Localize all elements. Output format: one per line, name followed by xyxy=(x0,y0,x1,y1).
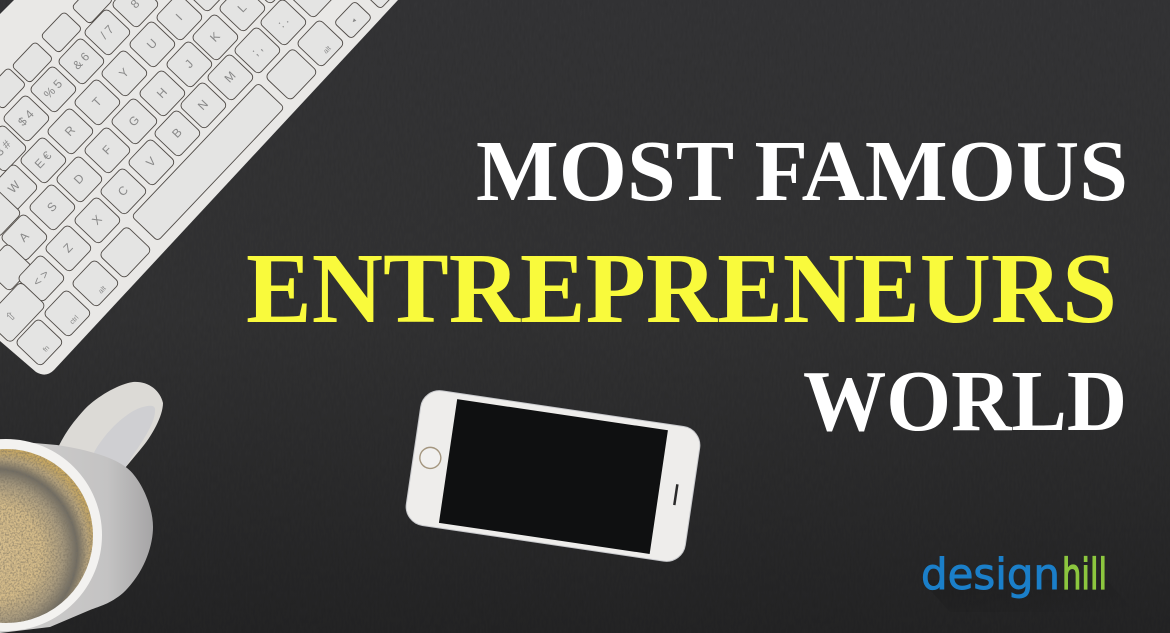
keyboard keys: alt xyxy=(98,285,108,295)
keyboard xyxy=(0,0,401,375)
keyboard keys xyxy=(0,0,401,367)
keyboard keys: alt xyxy=(323,45,333,55)
mug handle xyxy=(57,382,163,478)
keyboard keys: T xyxy=(89,94,105,109)
keyboard keys: K xyxy=(207,29,223,45)
logo wordmark: hill: hill xyxy=(1062,550,1107,600)
home button xyxy=(418,446,442,470)
keyboard keys: W xyxy=(5,178,23,196)
keyboard keys: < > xyxy=(30,267,52,289)
keyboard keys: Y xyxy=(116,65,132,81)
keyboard keys: : . xyxy=(274,14,292,30)
speaker xyxy=(673,484,679,505)
keyboard keys: J xyxy=(182,57,196,71)
keyboard keys: fn xyxy=(42,345,51,354)
keyboard keys: $ 4 xyxy=(15,107,37,129)
keyboard keys: F xyxy=(99,143,115,157)
keyboard keys: ctrl xyxy=(69,314,81,326)
logo wordmark: design: design xyxy=(921,550,1060,600)
smartphone xyxy=(404,388,702,564)
mug body xyxy=(0,440,153,633)
phone body xyxy=(404,388,702,564)
keyboard keys: & 6 xyxy=(70,49,93,72)
keyboard body xyxy=(0,0,398,375)
coffee surface xyxy=(0,449,93,623)
logo: designhill xyxy=(921,550,1135,612)
mug rim xyxy=(0,439,102,631)
keyboard keys: M xyxy=(221,69,239,85)
keyboard keys: U xyxy=(144,36,160,52)
phone screen xyxy=(439,399,668,554)
keyboard keys: A xyxy=(16,229,32,245)
keyboard keys: ; , xyxy=(248,42,266,58)
keyboard keys: / 7 xyxy=(97,22,117,42)
keyboard keys: R xyxy=(62,123,78,139)
keyboard keys: I xyxy=(173,11,185,23)
coffee mug xyxy=(0,382,163,633)
keyboard keys: S xyxy=(44,199,60,215)
keyboard keys: D xyxy=(71,171,87,187)
heading line: entrepreneurs: ENTREPRENEURS xyxy=(246,232,1117,344)
keyboard keys: Z xyxy=(60,241,76,255)
keyboard keys: B xyxy=(169,125,185,141)
keyboard keys: ◂ xyxy=(350,17,358,25)
logo long shadow xyxy=(921,580,1135,612)
heading line: world: WORLD xyxy=(803,352,1127,449)
keyboard keys: C xyxy=(115,183,131,199)
heading line: most famous: MOST FAMOUS xyxy=(476,122,1128,219)
keyboard keys: % 5 xyxy=(41,76,65,101)
keyboard keys: V xyxy=(143,154,159,170)
keyboard keys: ⇧ xyxy=(2,308,19,325)
keyboard keys: N xyxy=(195,97,211,113)
keyboard keys: L xyxy=(235,1,250,15)
keyboard keys: X xyxy=(89,212,105,228)
keyboard keys: E € xyxy=(32,148,55,171)
keyboard keys: G xyxy=(126,113,142,129)
title xyxy=(246,122,1128,449)
keyboard keys: H xyxy=(154,85,170,101)
